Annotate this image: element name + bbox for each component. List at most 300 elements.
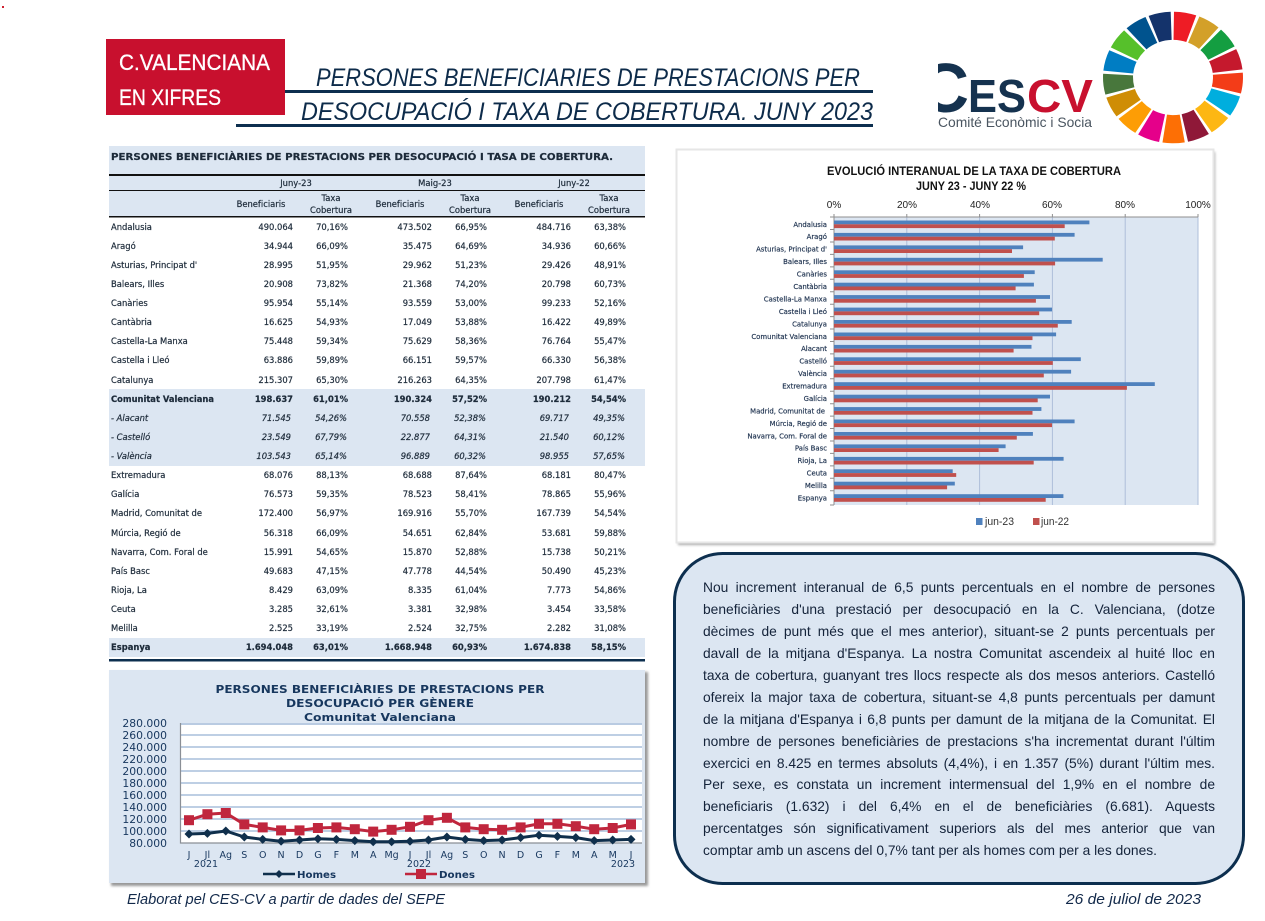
category labels: País Basc [795, 445, 827, 453]
chart title [216, 683, 544, 724]
category labels: Espanya [798, 494, 827, 502]
row: Navarra: 52,88% [455, 547, 487, 557]
row: Rioja: 63,09% [316, 585, 348, 595]
commentary text: ofereix la major taxa de cobertura, situant-se 4,8 punts percentuals per damunt [703, 690, 1215, 705]
row: Canàries: 53,00% [455, 298, 487, 308]
row: Melilla: 31,08% [594, 623, 626, 633]
row: Cantàbria: 16.422 [542, 317, 571, 327]
x axis labels: J [187, 850, 190, 861]
row: Aragó: 60,66% [594, 241, 626, 251]
row: Madrid: 56,97% [316, 508, 348, 518]
panel: commentary box [674, 554, 1244, 884]
chart title: DESOCUPACIÓ PER GÈNERE [286, 697, 474, 710]
legend: Homes [297, 870, 336, 881]
category labels: Asturias, Principat d' [756, 246, 827, 254]
row: Castelló: 21.540 [540, 432, 569, 442]
category labels: Cantàbria [793, 283, 827, 291]
row: Galícia: 55,96% [594, 489, 626, 499]
table column headers: Cobertura [588, 205, 630, 215]
row: Navarra [111, 547, 626, 557]
row: Ceuta: 3.454 [547, 604, 571, 614]
table column headers: Beneficiaris [515, 199, 563, 209]
y axis labels: 220.000 [122, 753, 167, 766]
row: Extremadura: 68.076 [264, 470, 293, 480]
row: País Basc: 49.683 [264, 566, 293, 576]
category labels: Comunitat Valenciana [751, 333, 827, 341]
row: Cantàbria: 49,89% [594, 317, 626, 327]
percent axis: 80% [1115, 200, 1135, 211]
row: Balears: 20.798 [542, 279, 571, 289]
category labels: Balears, Illes [783, 258, 827, 266]
row: Navarra: Navarra, Com. Foral de [111, 547, 208, 557]
table column headers: Maig-23 [418, 178, 452, 188]
x axis labels: G [314, 850, 322, 861]
table column headers: Cobertura [310, 205, 352, 215]
row: Castella-La Manxa: 75.629 [403, 336, 432, 346]
row: València: 96.889 [401, 451, 430, 461]
commentary text: Nou increment interanual de 6,5 punts percentuals en el nombre de persones [703, 580, 1215, 595]
row: Navarra: 15.738 [542, 547, 571, 557]
percent axis: 40% [970, 200, 990, 211]
red speck [2, 6, 4, 8]
row: València: 57,65% [593, 451, 625, 461]
row: Alacant: 69.717 [540, 413, 570, 423]
x axis labels: A [370, 850, 377, 861]
x axis labels: O [480, 850, 487, 861]
x axis labels: 2022 [407, 859, 431, 870]
category labels: Castelló [799, 358, 827, 366]
row: Asturias: 29.962 [403, 260, 432, 270]
row: Aragó: 34.936 [542, 241, 571, 251]
row: Melilla: 2.282 [547, 623, 571, 633]
y axis labels: 100.000 [122, 825, 167, 838]
category labels: Múrcia, Regió de [770, 420, 827, 428]
row: Galícia: 58,41% [455, 489, 487, 499]
row: Aragó [111, 241, 626, 251]
x axis labels: F [555, 850, 560, 861]
row: Aragó: 34.944 [264, 241, 293, 251]
row: Galícia: 76.573 [264, 489, 293, 499]
bars: jun-22 [834, 224, 1127, 502]
row: Espanya: Espanya [111, 642, 150, 652]
row: Castella i Lleó: 66.330 [542, 355, 571, 365]
row: Balears: 21.368 [403, 279, 432, 289]
row: Castella i Lleó: Castella i Lleó [111, 355, 170, 365]
table column headers: Taxa [599, 193, 618, 203]
category labels: Melilla [805, 482, 827, 490]
row: Comunitat Valenciana: 190.212 [533, 394, 571, 404]
row: Madrid: 54,54% [594, 508, 626, 518]
category labels: Navarra, Com. Foral de [747, 432, 827, 440]
percent axis [827, 200, 1211, 211]
row: Melilla: Melilla [111, 623, 138, 633]
row: Madrid [111, 508, 626, 518]
row: Múrcia: 54.651 [403, 528, 432, 538]
category labels: Castella i Lleó [779, 308, 827, 316]
row: País Basc: País Basc [111, 566, 150, 576]
row: Alacant [111, 413, 625, 423]
row: Comunitat Valenciana: 198.637 [255, 394, 293, 404]
row: Alacant: 49,35% [593, 413, 625, 423]
row: Andalusia: Andalusia [111, 222, 152, 232]
row: Castella-La Manxa: 76.764 [542, 336, 571, 346]
y axis labels: 140.000 [122, 801, 167, 814]
row: Canàries: 93.559 [403, 298, 432, 308]
table column headers: Juny-23 [279, 178, 312, 188]
row: Cantàbria: 53,88% [455, 317, 487, 327]
legend [263, 869, 475, 881]
commentary text: nombre de persones beneficiàries de prestacions s'ha incrementat durant l'últim [703, 734, 1215, 749]
row: Castella i Lleó: 59,57% [455, 355, 487, 365]
row: Melilla: 32,75% [455, 623, 487, 633]
table column headers: Beneficiaris [237, 199, 285, 209]
commentary text: beneficiàries d'una prestació per desocupació en la C. Valenciana, (dotze [703, 602, 1215, 617]
logo: CES-CV: Comité Econòmic i Socia [938, 114, 1092, 130]
row: Navarra: 15.991 [264, 547, 293, 557]
row: Espanya: 1.668.948 [385, 642, 432, 652]
row: País Basc: 47,15% [316, 566, 348, 576]
row: Extremadura: 68.181 [542, 470, 571, 480]
row: País Basc: 44,54% [455, 566, 487, 576]
x axis labels: M [609, 850, 617, 861]
bar chart title [827, 163, 1121, 193]
logo: CES-CV: ES [968, 70, 1026, 122]
percent axis: 100% [1185, 200, 1211, 211]
category labels: Extremadura [782, 382, 827, 390]
legend: Dones [439, 870, 475, 881]
row: Castella-La Manxa [111, 336, 626, 346]
row: Asturias: 28.995 [264, 260, 293, 270]
row: Madrid: 55,70% [455, 508, 487, 518]
category labels: Galícia [804, 395, 827, 403]
row: Asturias: 51,23% [455, 260, 487, 270]
row: Catalunya [111, 375, 626, 385]
row: Extremadura: 88,13% [316, 470, 348, 480]
line: Dones [189, 813, 631, 832]
x axis labels: A [591, 850, 598, 861]
category labels [747, 221, 827, 503]
category labels: València [798, 370, 827, 378]
category labels: Andalusia [793, 221, 827, 229]
row: Cantàbria: 16.625 [264, 317, 293, 327]
row: València: 103.543 [256, 451, 291, 461]
table column headers: Taxa [321, 193, 340, 203]
category labels: Aragó [807, 233, 827, 241]
y axis labels: 120.000 [122, 813, 167, 826]
row: Navarra: 50,21% [594, 547, 626, 557]
row: Espanya: 58,15% [591, 642, 627, 652]
row: Madrid: 169.916 [397, 508, 432, 518]
row: Múrcia: 66,09% [316, 528, 348, 538]
x axis labels: Jl [204, 850, 210, 861]
x axis labels: S [462, 850, 468, 861]
x axis labels: G [535, 850, 543, 861]
row: Balears: 20.908 [264, 279, 293, 289]
y axis labels: 260.000 [122, 729, 167, 742]
row: Canàries: 95.954 [264, 298, 293, 308]
row: Alacant: 54,26% [315, 413, 347, 423]
source note: Elaborat pel CES-CV a partir de dades del SEPE [127, 892, 445, 908]
row: Castella i Lleó: 63.886 [264, 355, 293, 365]
row: Castella-La Manxa: 55,47% [594, 336, 626, 346]
row: Canàries: 52,16% [594, 298, 626, 308]
title: DESOCUPACIÓ I TAXA DE COBERTURA. JUNY 2023 [301, 97, 873, 126]
x axis labels: J [629, 850, 632, 861]
x axis labels: N [499, 850, 506, 861]
commentary text: beneficiaris (1.632) i del 6,4% en el de beneficiàries (6.681). Aquests [703, 799, 1215, 814]
row: Catalunya: 61,47% [594, 375, 626, 385]
row: Melilla: 2.525 [269, 623, 293, 633]
table column headers: Juny-22 [557, 178, 590, 188]
category labels: Canàries [797, 271, 827, 279]
table column headers: Taxa [460, 193, 479, 203]
row: Comunitat Valenciana: 61,01% [313, 394, 349, 404]
row: Andalusia: 473.502 [397, 222, 432, 232]
row: Aragó: 66,09% [316, 241, 348, 251]
row: Castelló: 67,79% [315, 432, 347, 442]
row: Canàries: 99.233 [542, 298, 571, 308]
x axis labels: F [334, 850, 339, 861]
row: Catalunya: 64,35% [455, 375, 487, 385]
x axis labels: N [278, 850, 285, 861]
commentary text: de la mitjana d'Espanya i 6,8 punts per damunt de la mitjana de la Comunitat. El [703, 712, 1215, 727]
row: Ceuta: 32,61% [316, 604, 348, 614]
y axis labels: 80.000 [129, 837, 167, 850]
row: València: 98.955 [540, 451, 569, 461]
row: Espanya: 1.674.838 [524, 642, 571, 652]
row: Extremadura [111, 470, 626, 480]
row: Extremadura: 68.688 [403, 470, 432, 480]
category labels: Castella-La Manxa [764, 295, 827, 303]
x axis labels: M [572, 850, 580, 861]
bars: jun-23 [834, 220, 1155, 498]
row: Andalusia: 484.716 [536, 222, 571, 232]
row: Balears: Balears, Illes [111, 279, 164, 289]
row: Catalunya: 215.307 [258, 375, 293, 385]
category labels: Madrid, Comunitat de [750, 407, 825, 415]
row: Espanya [111, 642, 627, 652]
row: Comunitat Valenciana [111, 394, 627, 404]
panel: gender line chart [109, 670, 648, 886]
row: Castella i Lleó: 56,38% [594, 355, 626, 365]
row: Castelló: 60,12% [593, 432, 625, 442]
x axis labels [187, 850, 635, 870]
panel: bar chart [676, 150, 1215, 545]
row: Balears: 74,20% [455, 279, 487, 289]
y axis labels: 200.000 [122, 765, 167, 778]
category labels: Catalunya [792, 320, 827, 328]
row: Castella i Lleó [111, 355, 626, 365]
row: Alacant: - Alacant [111, 413, 149, 423]
table column headers: Beneficiaris [376, 199, 424, 209]
row: Andalusia: 70,16% [316, 222, 348, 232]
y axis labels [122, 717, 167, 850]
x axis labels: 2021 [194, 859, 218, 870]
row: Catalunya: 65,30% [316, 375, 348, 385]
row: Canàries: 55,14% [316, 298, 348, 308]
row: Cantàbria [111, 317, 626, 327]
row: València: 65,14% [315, 451, 347, 461]
row: Rioja [111, 585, 626, 595]
row: Rioja: 7.773 [547, 585, 571, 595]
y axis labels: 160.000 [122, 789, 167, 802]
row: Espanya: 60,93% [452, 642, 488, 652]
row: Ceuta: 32,98% [455, 604, 487, 614]
line: Homes [189, 831, 631, 842]
row: Madrid: Madrid, Comunitat de [111, 508, 202, 518]
row: Castelló [111, 432, 625, 442]
x axis labels: Jl [425, 850, 431, 861]
category labels: Ceuta [807, 470, 827, 478]
table column headers [237, 178, 630, 215]
row: Andalusia: 66,95% [455, 222, 487, 232]
badge: C.Valenciana en xifres: EN XIFRES [119, 85, 221, 110]
row: Alacant: 71.545 [262, 413, 291, 423]
chart title: Comunitat Valenciana [304, 712, 456, 724]
commentary text: dècimes de punt més que el mes anterior), situant-se 2 punts percentuals per [703, 624, 1215, 639]
row: Castelló: 22.877 [401, 432, 431, 442]
row: Alacant: 52,38% [454, 413, 486, 423]
bar chart legend: jun-22 [1040, 516, 1069, 528]
row: Rioja: 61,04% [455, 585, 487, 595]
x axis labels: J [408, 850, 411, 861]
row: Catalunya: 216.263 [397, 375, 432, 385]
commentary text: exercici en 8.425 en termes absoluts (4,4%), i en 1.357 (5%) durant l'últim mes. [703, 756, 1215, 770]
badge: C.Valenciana en xifres: C.VALENCIANA [119, 50, 270, 75]
row: Catalunya: Catalunya [111, 375, 153, 385]
row: Ceuta: 3.381 [408, 604, 432, 614]
bar chart title: JUNY 23 - JUNY 22 % [916, 179, 1026, 193]
row: Aragó: 35.475 [403, 241, 432, 251]
bar chart legend: jun-23 [984, 516, 1014, 528]
row: Rioja: 54,86% [594, 585, 626, 595]
commentary text: comptar amb un ascens del 0,7% tant per als homes com per a les dones. [703, 843, 1157, 858]
row: Alacant: 70.558 [401, 413, 430, 423]
row: Ceuta: Ceuta [111, 604, 136, 614]
logo: CES-CV: C [920, 49, 969, 127]
row: Navarra: 54,65% [316, 547, 348, 557]
row: Asturias: 48,91% [594, 260, 626, 270]
row: Navarra: 15.870 [403, 547, 432, 557]
row: Balears: 73,82% [316, 279, 348, 289]
row: Andalusia: 490.064 [258, 222, 293, 232]
percent axis: 0% [827, 200, 841, 211]
commentary text: taxa de cobertura, guanyant tres llocs respecte als dos mesos anteriors. Castelló [703, 668, 1215, 683]
row: Comunitat Valenciana: 57,52% [452, 394, 488, 404]
percent axis: 20% [897, 200, 917, 211]
row: Asturias: 51,95% [316, 260, 348, 270]
row: Castella-La Manxa: 59,34% [316, 336, 348, 346]
x axis labels: S [241, 850, 247, 861]
row: Ceuta: 3.285 [269, 604, 293, 614]
x axis labels: O [259, 850, 266, 861]
row: Catalunya: 207.798 [536, 375, 571, 385]
row: Múrcia: 62,84% [455, 528, 487, 538]
category labels: Rioja, La [798, 457, 827, 465]
row: Múrcia: 56.318 [264, 528, 293, 538]
bar chart legend [976, 516, 1069, 528]
row: Canàries: Canàries [111, 298, 148, 308]
row: Castelló: 23.549 [262, 432, 291, 442]
row: Rioja: Rioja, La [111, 585, 147, 595]
table column headers: Cobertura [449, 205, 491, 215]
row: Balears: 60,73% [594, 279, 626, 289]
y axis labels: 280.000 [122, 717, 167, 730]
commentary text: davall de la mitjana d'Espanya. La nostra Comunitat ascendeix al huité lloc en [703, 646, 1215, 661]
row: Múrcia: Múrcia, Regió de [111, 528, 181, 538]
row: Galícia [111, 489, 626, 499]
row: Múrcia: 59,88% [594, 528, 626, 538]
row: Múrcia [111, 528, 626, 538]
logo: CES-CV [938, 63, 1093, 127]
chart title: PERSONES BENEFICIÀRIES DE PRESTACIONS PER [216, 683, 544, 696]
panel: data table [109, 146, 645, 662]
bar chart title: EVOLUCIÓ INTERANUAL DE LA TAXA DE COBERTURA [827, 163, 1121, 178]
row: Espanya: 1.694.048 [246, 642, 293, 652]
row: Asturias [111, 260, 626, 270]
table heading: PERSONES BENEFICIÀRIES DE PRESTACIONS PER DESOCUPACIÓ I TASA DE COBERTURA. [111, 151, 613, 163]
row: Rioja: 8.429 [269, 585, 293, 595]
row: Castella i Lleó: 59,89% [316, 355, 348, 365]
row: Castella-La Manxa: 75.448 [264, 336, 293, 346]
category labels: Alacant [801, 345, 827, 353]
row: Melilla: 2.524 [408, 623, 432, 633]
row: Aragó: 64,69% [455, 241, 487, 251]
row: Castella-La Manxa: 58,36% [455, 336, 487, 346]
row: Comunitat Valenciana: 54,54% [591, 394, 627, 404]
row: Extremadura: 80,47% [594, 470, 626, 480]
row: Castella i Lleó: 66.151 [403, 355, 432, 365]
commentary text [703, 580, 1215, 858]
x axis labels: D [296, 850, 303, 861]
row: País Basc: 50.490 [542, 566, 571, 576]
date: 26 de juliol de 2023 [1065, 892, 1201, 908]
logo: CES-CV: CV [1027, 70, 1093, 122]
row: Aragó: Aragó [111, 241, 136, 251]
row: País Basc: 45,23% [594, 566, 626, 576]
row: València: - València [111, 451, 152, 461]
title: PERSONES BENEFICIARIES DE PRESTACIONS PER [316, 64, 860, 92]
row: València [111, 451, 625, 461]
y axis labels: 180.000 [122, 777, 167, 790]
x axis labels: D [517, 850, 524, 861]
x axis labels: Mg [384, 850, 399, 861]
icon: SDG wheel [1117, 25, 1229, 130]
row: Rioja: 8.335 [408, 585, 432, 595]
row: Andalusia [111, 222, 626, 232]
row: Madrid: 172.400 [258, 508, 293, 518]
row: País Basc [111, 566, 626, 576]
commentary text: Per sexe, es constata un increment intermensual del 1,9% en el nombre de [703, 777, 1215, 792]
row: Castelló: 64,31% [454, 432, 486, 442]
row: Melilla [111, 623, 626, 633]
row: Asturias: Asturias, Principat d' [111, 260, 197, 270]
row: Múrcia: 53.681 [542, 528, 571, 538]
row: Comunitat Valenciana: 190.324 [394, 394, 432, 404]
row: Castelló: - Castelló [111, 432, 150, 442]
row: Melilla: 33,19% [316, 623, 348, 633]
row: Extremadura: Extremadura [111, 470, 165, 480]
row: Cantàbria: 17.049 [403, 317, 432, 327]
row: Cantàbria: Cantàbria [111, 317, 152, 327]
row: Ceuta: 33,58% [594, 604, 626, 614]
row: Ceuta [111, 604, 626, 614]
row: València: 60,32% [454, 451, 486, 461]
row: País Basc: 47.778 [403, 566, 432, 576]
row: Extremadura: 87,64% [455, 470, 487, 480]
row: Madrid: 167.739 [536, 508, 571, 518]
row: Galícia: 59,35% [316, 489, 348, 499]
